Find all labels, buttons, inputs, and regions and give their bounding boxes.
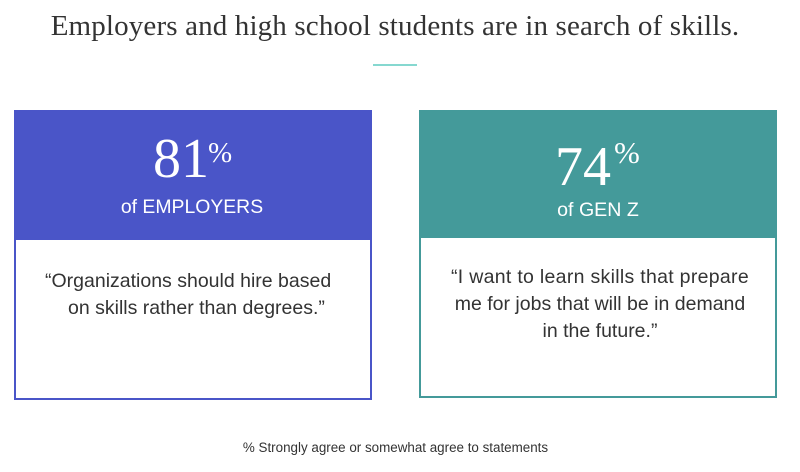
panel: employers: [14, 110, 372, 400]
gen z header: [419, 110, 777, 238]
quote: gen z: me for jobs that will be in demand: [455, 293, 745, 315]
panel: gen z: [419, 110, 777, 398]
quote: employers: [45, 270, 331, 319]
quote: gen z: in the future.”: [543, 320, 657, 342]
title: Employers and high school students are in search of skills.: [51, 10, 739, 42]
quote: gen z: [451, 266, 749, 342]
stat: 81%: 81%: [153, 128, 232, 190]
label: of gen z: of GEN Z: [557, 199, 639, 221]
employers header: [14, 110, 372, 240]
quote: gen z: “I want to learn skills that prepare: [451, 266, 749, 288]
stat: 74%: 74%: [555, 135, 640, 198]
quote: employers: “Organizations should hire based: [45, 270, 331, 292]
quote: employers: on skills rather than degrees.”: [68, 297, 325, 319]
footnote: % Strongly agree or somewhat agree to statements: [243, 440, 548, 455]
label: of employers: of EMPLOYERS: [121, 196, 263, 218]
